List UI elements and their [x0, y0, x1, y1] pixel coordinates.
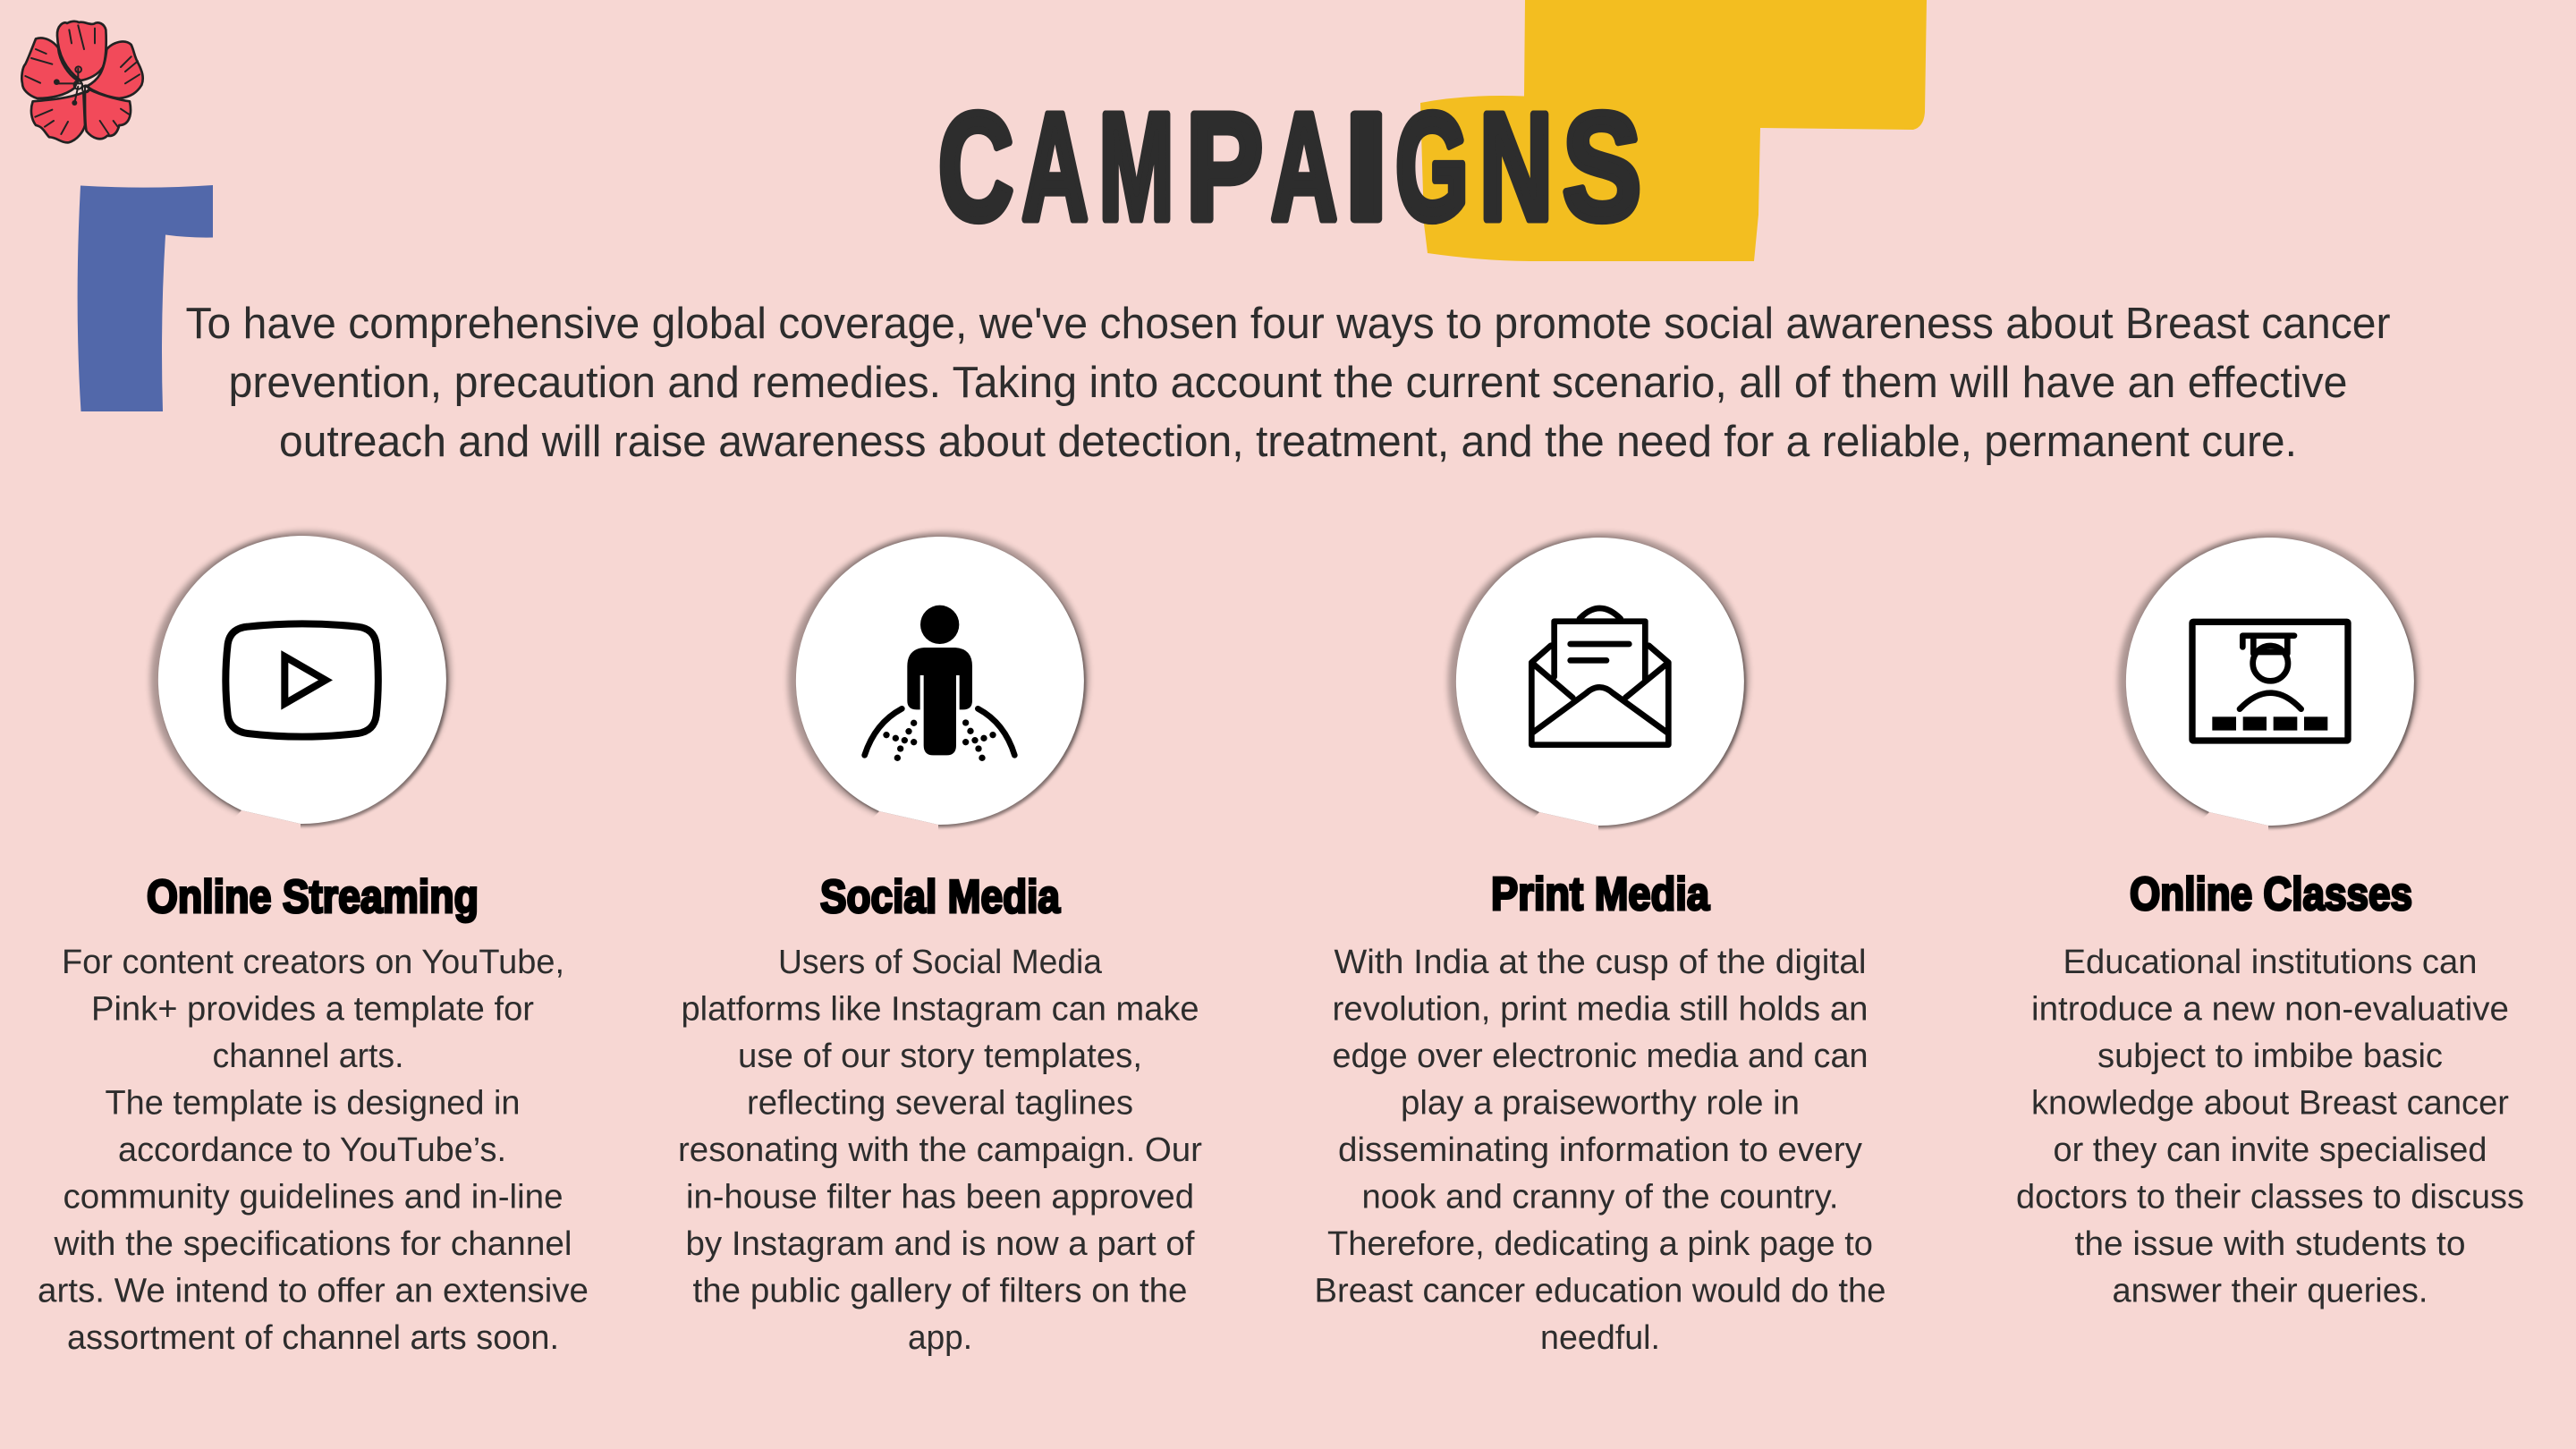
- body text: Social Media: resonating with the campaign. Our: [678, 1131, 1202, 1169]
- body text: Online Streaming: community guidelines and in-line: [63, 1179, 564, 1216]
- heading: Online Streaming: Online Streaming: [147, 871, 479, 923]
- title: A: [1021, 82, 1088, 252]
- heading: Print Media: Print Media: [1491, 869, 1710, 920]
- title: [938, 82, 1641, 252]
- heading: Social Media: Social Media: [820, 871, 1061, 923]
- body text: Print Media: Therefore, dedicating a pink page to: [1327, 1225, 1873, 1263]
- circle badge: Social Media: [788, 532, 1089, 827]
- title: S: [1563, 82, 1641, 252]
- title: A: [1271, 82, 1337, 252]
- body text: Online Classes: [2016, 944, 2524, 1309]
- circle badge: Print Media: [1448, 533, 1749, 828]
- intro paragraph: To have comprehensive global coverage, we've chosen four ways to promote social awareness about Breast cancer: [186, 300, 2390, 348]
- intro paragraph: [186, 300, 2390, 466]
- column: Social Media: [678, 532, 1202, 1357]
- title: I: [1343, 82, 1388, 252]
- body text: Online Streaming: with the specifications for channel: [53, 1225, 572, 1263]
- body text: Social Media: use of our story templates,: [738, 1038, 1142, 1075]
- column: Online Streaming: [38, 531, 589, 1357]
- body text: Social Media: [678, 944, 1202, 1357]
- heading: Online Classes: Online Classes: [2130, 869, 2412, 920]
- icon: open envelope with letter: [1531, 608, 1668, 745]
- body text: Print Media: needful.: [1540, 1319, 1660, 1357]
- icon: person with arcs and dots: [865, 606, 1014, 761]
- body text: Online Streaming: accordance to YouTube’s.: [118, 1131, 506, 1169]
- intro paragraph: prevention, precaution and remedies. Taking into account the current scenario, all of them will have an effective: [229, 359, 2347, 407]
- icon: video play: [225, 623, 378, 737]
- body text: Print Media: Breast cancer education would do the: [1315, 1272, 1885, 1309]
- body text: Print Media: play a praiseworthy role in: [1401, 1084, 1800, 1122]
- column: Print Media: [1315, 533, 1885, 1357]
- icon: graduate on screen: [2192, 622, 2348, 741]
- body text: Online Streaming: assortment of channel arts soon.: [67, 1319, 559, 1357]
- body text: Online Classes: introduce a new non-evaluative: [2031, 991, 2509, 1029]
- circle badge: Online Streaming: [150, 531, 451, 826]
- body text: Print Media: disseminating information to every: [1338, 1131, 1862, 1169]
- body text: Online Classes: Educational institutions can: [2063, 944, 2478, 981]
- column: Online Classes: [2016, 533, 2524, 1309]
- body text: Social Media: the public gallery of filters on the: [692, 1272, 1188, 1309]
- body text: Social Media: platforms like Instagram can make: [682, 991, 1199, 1029]
- title: C: [938, 82, 1013, 252]
- body text: Online Streaming: For content creators on YouTube,: [62, 944, 564, 981]
- yellow block shape behind title: [1420, 0, 1927, 261]
- body text: Online Streaming: [38, 944, 589, 1357]
- body text: Online Classes: the issue with students to: [2075, 1225, 2465, 1263]
- body text: Online Streaming: arts. We intend to offer an extensive: [38, 1272, 589, 1309]
- body text: Social Media: in-house filter has been approved: [686, 1179, 1194, 1216]
- body text: Print Media: edge over electronic media and can: [1333, 1038, 1868, 1075]
- icon: red flower: [21, 21, 143, 142]
- body text: Print Media: [1315, 944, 1885, 1357]
- body text: Online Streaming: channel arts.: [213, 1038, 404, 1075]
- body text: Online Classes: answer their queries.: [2113, 1272, 2428, 1309]
- title: P: [1186, 82, 1263, 252]
- body text: Print Media: With India at the cusp of the digital: [1335, 944, 1866, 981]
- body text: Online Classes: or they can invite specialised: [2054, 1131, 2487, 1169]
- body text: Online Streaming: The template is designed in: [106, 1084, 521, 1122]
- body text: Online Classes: knowledge about Breast cancer: [2031, 1084, 2509, 1122]
- circle badge: Online Classes: [2118, 533, 2419, 828]
- body text: Social Media: Users of Social Media: [778, 944, 1103, 981]
- body text: Online Classes: subject to imbibe basic: [2097, 1038, 2443, 1075]
- body text: Online Classes: doctors to their classes to discuss: [2016, 1179, 2524, 1216]
- title: G: [1395, 82, 1469, 252]
- body text: Social Media: app.: [908, 1319, 972, 1357]
- body text: Print Media: nook and cranny of the country.: [1361, 1179, 1839, 1216]
- body text: Social Media: by Instagram and is now a part of: [685, 1225, 1195, 1263]
- title: N: [1479, 82, 1553, 252]
- title: M: [1098, 82, 1174, 252]
- blue corner bracket shape: [78, 185, 213, 411]
- body text: Online Streaming: Pink+ provides a template for: [91, 991, 534, 1029]
- body text: Social Media: reflecting several taglines: [747, 1084, 1133, 1122]
- body text: Print Media: revolution, print media still holds an: [1333, 991, 1868, 1029]
- intro paragraph: outreach and will raise awareness about detection, treatment, and the need for a reliable, permanent cure.: [279, 418, 2297, 466]
